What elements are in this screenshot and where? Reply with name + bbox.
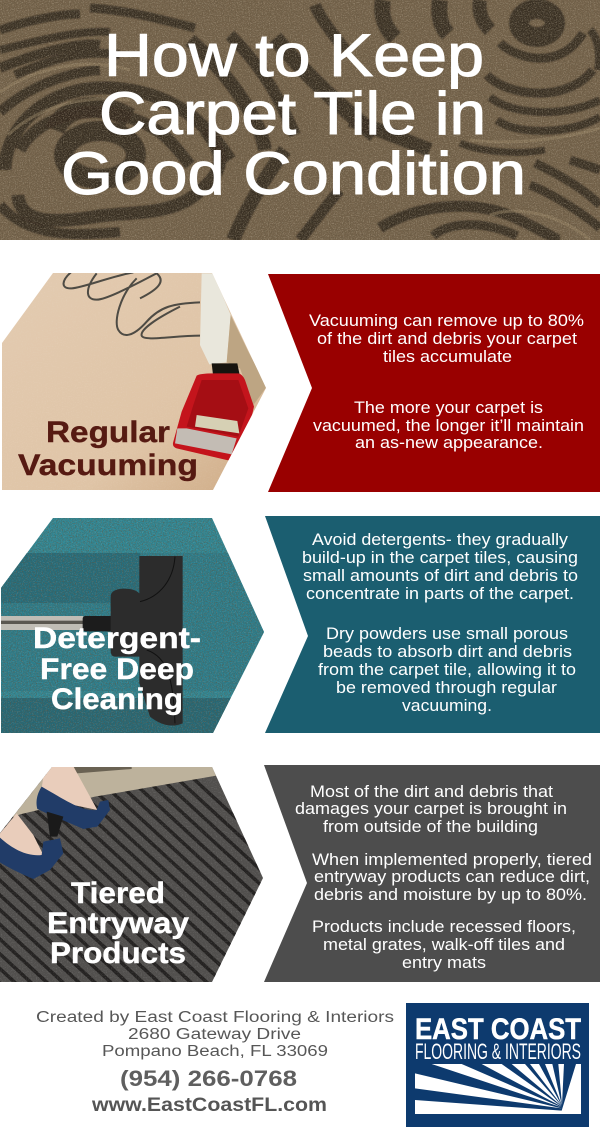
text panel: concentrate in parts of the carpet.: [306, 585, 574, 603]
top-left waves: [90, 8, 195, 28]
section heading: Entryway: [47, 907, 189, 940]
logo sunburst: [415, 1064, 581, 1114]
centre diagonal bands: [230, 35, 295, 135]
section heading: Tiered: [71, 877, 165, 910]
text panel: entry mats: [402, 954, 486, 972]
title text: How to Keep: [104, 22, 484, 89]
text panel: from the carpet tile, allowing it to: [318, 661, 576, 679]
text panel: damages your carpet is brought in: [295, 800, 567, 818]
text panel: small amounts of dirt and debris to: [303, 567, 578, 585]
section heading: Cleaning: [51, 683, 183, 716]
text panel: an as-new appearance.: [355, 434, 543, 452]
section 3: tiered entryway products: [0, 765, 600, 1000]
section heading: Detergent-: [33, 622, 201, 655]
section heading: [18, 416, 198, 482]
vacuum window: [195, 415, 239, 433]
text panel: [268, 274, 600, 492]
section heading: Products: [50, 937, 186, 970]
right swirl arcs: [519, 9, 555, 37]
vacuum connector: [212, 363, 240, 374]
text panel: metal grates, walk-off tiles and: [323, 936, 565, 954]
text panel: vacuumed, the longer it’ll maintain: [313, 417, 584, 435]
section 2: detergent-free deep cleaning: [0, 516, 600, 734]
text panel: vacuuming.: [402, 697, 492, 715]
left swirl rings: [5, 88, 230, 170]
footer contact details: 2680 Gateway Drive: [128, 1026, 301, 1043]
lower shoe: [0, 838, 63, 879]
photo: vacuum on beige carpet: [0, 272, 270, 491]
text panel: beads to absorb dirt and debris: [323, 643, 572, 661]
vacuum bag: [200, 273, 231, 364]
section heading: [47, 877, 189, 970]
section 1: regular vacuuming: [0, 272, 600, 492]
text panel: of the dirt and debris your carpet: [317, 330, 577, 348]
text panel: The more your carpet is: [354, 399, 543, 417]
section heading: [33, 622, 201, 716]
text panel: When implemented properly, tiered: [312, 851, 592, 869]
floor threshold: [12, 767, 216, 817]
carpet texture background: [0, 0, 600, 240]
text panel: be removed through regular: [336, 679, 558, 697]
title text: Carpet Tile in: [99, 80, 486, 147]
footer contact details: (954) 266-0768: [120, 1066, 297, 1091]
footer contact details: [36, 1009, 394, 1116]
text panel: Vacuuming can remove up to 80%: [309, 312, 584, 330]
title banner: [0, 0, 600, 240]
logo: East Coast Flooring & Interiors: [406, 1003, 589, 1127]
photo: vacuum head on teal carpet: [0, 518, 270, 734]
section heading: Vacuuming: [18, 449, 198, 482]
vacuum head: [111, 556, 183, 726]
title text: Good Condition: [61, 140, 526, 207]
centre top columns: [382, 0, 395, 38]
text panel: debris and moisture by up to 80%.: [314, 886, 587, 904]
text panel: build-up in the carpet tiles, causing: [302, 549, 578, 567]
footer contact details: Created by East Coast Flooring & Interiors: [36, 1009, 394, 1026]
text panel: Products include recessed floors,: [312, 918, 576, 936]
vacuum tube: [0, 616, 83, 630]
upper shoe: [37, 787, 110, 829]
photo: shoes on entry mat: [0, 767, 263, 982]
section heading: Free Deep: [40, 653, 194, 686]
text panel: Most of the dirt and debris that: [310, 783, 553, 801]
text panel: Avoid detergents- they gradually: [312, 531, 569, 549]
vacuum red body: [173, 373, 254, 460]
vacuum bumper: [175, 428, 237, 454]
legs: [42, 765, 97, 810]
vacuum ribbed hose: [82, 616, 111, 632]
text panel: entryway products can reduce dirt,: [314, 868, 590, 886]
text panel: from outside of the building: [323, 818, 538, 836]
footer contact details: Pompano Beach, FL 33069: [102, 1043, 328, 1060]
text panel: [264, 765, 600, 982]
text panel: [265, 516, 600, 733]
text panel: tiles accumulate: [383, 348, 512, 366]
text panel: Dry powders use small porous: [326, 625, 568, 643]
power cord: [64, 272, 200, 338]
section heading: Regular: [46, 416, 170, 449]
title text: [64, 34, 522, 196]
footer contact details: www.EastCoastFL.com: [91, 1094, 327, 1116]
lower-right waves: [535, 163, 600, 205]
